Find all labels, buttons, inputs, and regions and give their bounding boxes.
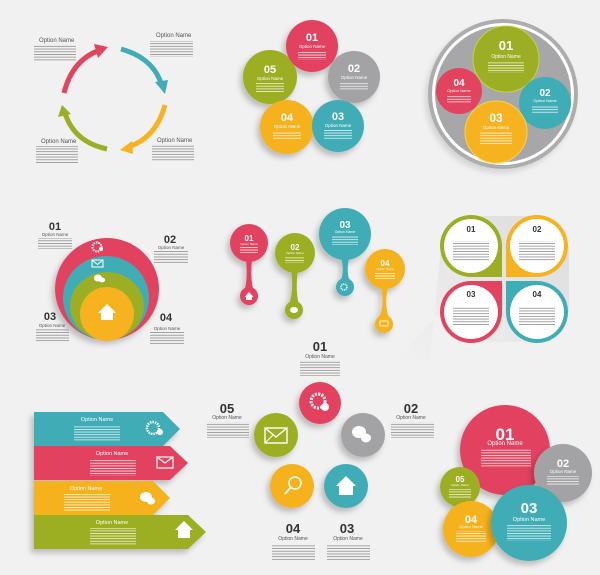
text block: bottom right: Option Name [157,138,193,144]
panel: four petals [395,215,569,360]
text block: top right [150,33,193,57]
circle 05: Option Name [257,76,284,81]
panel: ring with circles [428,19,578,169]
label 03 [36,311,69,342]
circle 01: Option Name [299,44,326,49]
ribbon green [34,515,206,549]
icon circle: envelope [254,413,298,457]
label 04 [272,521,315,561]
label 02: 02 [164,234,176,246]
layer: red [55,238,159,340]
ribbon teal [34,412,180,446]
bubble 05: Option Name [451,483,469,487]
panel: arrow cycle [34,33,194,163]
icon: envelope [92,260,103,267]
circle 01: Option Name [491,54,521,60]
circle 03: 03 [489,111,503,125]
circle 01 [286,20,338,72]
label 02: Option Name [158,245,185,250]
bubble 01: Option Name [487,441,523,447]
circle 05: 05 [264,64,276,76]
bubble 01: 01 [496,425,514,444]
ribbon yellow: Option Name [70,486,102,492]
pin 04 [365,249,405,333]
icon circle: house [324,464,368,508]
arrow: yellow [120,105,165,154]
petal 04 [506,281,568,343]
circle 04: 04 [281,112,294,124]
petal 01 [440,215,502,277]
icon: gear [92,242,103,252]
layer: yellow [80,287,134,341]
icon circle: search [270,464,314,508]
circle 01: 01 [499,38,513,53]
circle 03: Option Name [483,125,510,130]
petal 03 [440,281,502,343]
layer: green [70,272,144,340]
text block: bottom right [152,138,194,162]
petal 02: 02 [533,225,542,234]
circle 02 [328,51,380,103]
panel: five circles [243,20,380,154]
icon: chat [94,274,105,282]
circle 04 [436,68,482,114]
panel: concentric layers [36,221,188,345]
bubble 05: 05 [456,475,465,484]
pin 03: 03 [339,220,351,231]
label 05: 05 [220,401,234,416]
petal 01: 01 [467,225,476,234]
label 04: 04 [286,521,301,536]
pin 01: 01 [245,234,254,243]
label 02: Option Name [396,415,426,421]
circle 03: Option Name [325,123,352,128]
icon circle: gear [299,382,341,424]
panel: overlapping bubbles [440,405,592,561]
text block: top left: Option Name [39,38,75,44]
pin 02: Option Name [286,251,304,255]
icon circle: chat [341,413,385,457]
label 04 [150,312,184,345]
label 04: Option Name [154,326,181,331]
circle 02: Option Name [533,98,558,103]
label 01: 01 [49,221,61,233]
ribbon yellow [34,481,170,515]
label 05 [207,401,249,438]
icon: house [98,304,116,320]
label 04: 04 [160,312,173,324]
arrow: green [58,105,107,149]
label 03 [327,521,370,561]
label 03: Option Name [333,536,363,542]
ribbon red [34,446,188,480]
ribbon green: Option Name [96,520,128,526]
circle 03: 03 [332,111,344,123]
text block: top left [34,38,76,61]
bubble 02: 02 [557,458,569,470]
bubble 04: Option Name [459,524,484,529]
pin 02 [275,233,315,319]
pin 04: Option Name [376,267,394,271]
panel: drop pins [230,208,405,333]
circle 03 [465,101,527,163]
bubble 03: Option Name [513,517,545,523]
pin 03 [319,208,371,296]
label 01: 01 [313,339,327,354]
label 03: 03 [340,521,354,536]
circle 03 [312,100,364,152]
arrow: red [64,44,108,93]
label 03: Option Name [39,323,66,328]
circle 02: 02 [348,63,360,75]
circle 01: 01 [306,32,318,44]
bubble 05 [440,467,480,507]
circle 02: 02 [539,88,551,99]
label 02 [154,234,188,263]
label 04: Option Name [278,536,308,542]
bubble 02 [534,444,592,502]
pin 01: Option Name [240,242,258,246]
bubble 01 [460,405,550,495]
label 01: Option Name [305,354,335,360]
panel: ribbons [34,412,206,549]
label 01: Option Name [42,232,69,237]
ribbon teal: Option Name [81,417,113,423]
text block: bottom left [36,139,78,163]
circle 04: 04 [453,78,465,89]
arrow: teal [121,49,168,94]
circle 01 [473,26,539,92]
pin 04: 04 [381,259,390,268]
circle 04 [260,100,314,154]
label 01 [300,339,340,376]
bubble 03 [491,485,567,561]
ribbon red: Option Name [96,451,128,457]
bubble 02: Option Name [550,469,577,474]
circle 05 [243,50,297,104]
layer: teal [63,256,149,340]
circle 02: Option Name [341,75,368,80]
label 01 [38,221,72,249]
petal 02 [506,215,568,277]
pin 02: 02 [291,243,300,252]
panel: icon circle cluster [207,339,434,561]
circle 04: Option Name [447,88,472,93]
circle 04: Option Name [274,124,301,129]
text block: top right: Option Name [156,33,192,39]
pin 03: Option Name [335,230,355,234]
circle 02 [519,77,571,129]
label 02: 02 [404,401,418,416]
petal 04: 04 [533,290,542,299]
text block: bottom left: Option Name [41,139,77,145]
label 03: 03 [44,311,56,323]
bubble 03: 03 [521,500,537,517]
label 02 [391,401,434,438]
bubble 04: 04 [465,514,478,526]
bubble 04 [443,501,499,557]
petal 03: 03 [467,290,476,299]
label 05: Option Name [212,415,242,421]
pin 01 [230,224,268,305]
